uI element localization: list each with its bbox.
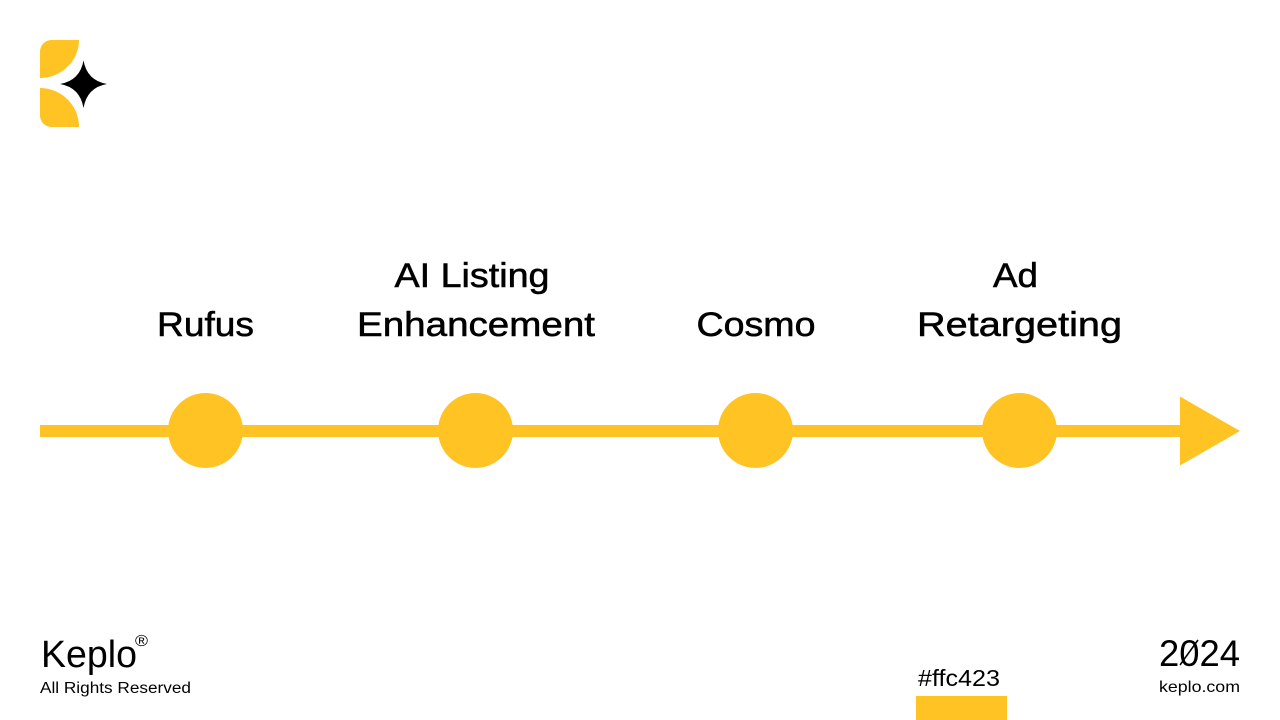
rights text: All Rights Reserved <box>40 680 191 697</box>
milestone dot: AI Listing Enhancement <box>438 393 513 468</box>
logo: star <box>60 60 107 108</box>
label: Rufus: Rufus <box>157 306 254 344</box>
year: 2024 <box>1159 633 1240 674</box>
logo <box>40 40 107 127</box>
timeline <box>40 393 1240 468</box>
website: keplo.com <box>1159 679 1240 696</box>
timeline line <box>40 425 1185 437</box>
timeline arrowhead <box>1180 396 1240 466</box>
label: AI Listing Enhancement: Enhancement <box>357 306 596 344</box>
brand name: Keplo <box>41 634 137 676</box>
label: Ad Retargeting: Ad <box>993 257 1038 295</box>
label: Cosmo: Cosmo <box>696 306 816 344</box>
brand name: ® <box>135 633 148 650</box>
milestone dot: Rufus <box>168 393 243 468</box>
label: Ad Retargeting <box>917 257 1122 344</box>
label: AI Listing Enhancement: AI Listing <box>394 257 550 295</box>
label: AI Listing Enhancement <box>357 257 596 344</box>
colour swatch label: #ffc423 <box>918 665 1000 691</box>
colour swatch <box>916 696 1007 720</box>
milestone dot: Cosmo <box>718 393 793 468</box>
milestone dot: Ad Retargeting <box>982 393 1057 468</box>
label: Ad Retargeting: Retargeting <box>917 306 1122 344</box>
logo: bottom leaf <box>40 88 79 127</box>
logo: top leaf <box>40 40 79 78</box>
